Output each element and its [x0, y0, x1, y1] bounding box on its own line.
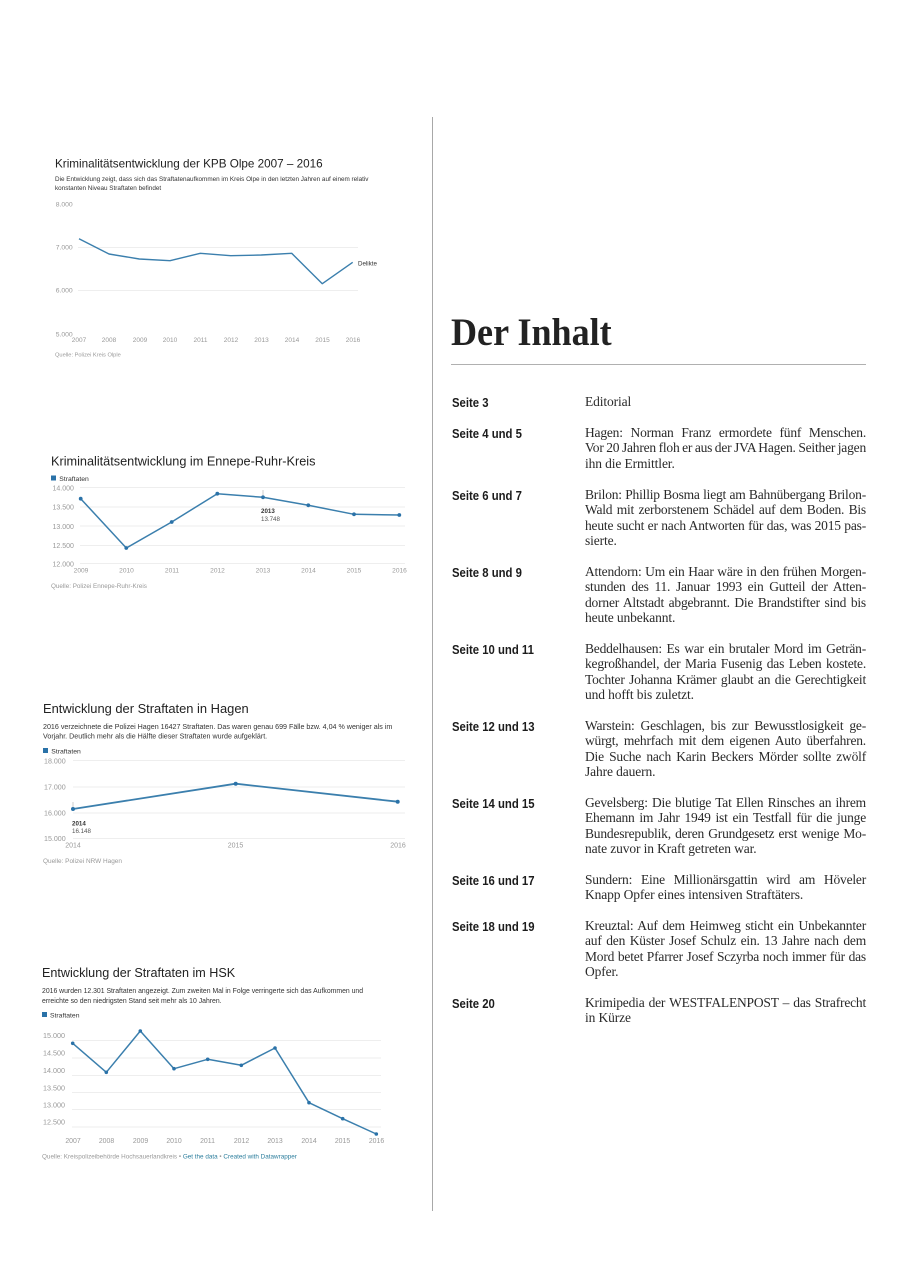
entry: Seite 10 und 11: Tochter Johanna Krämer glaubt an die Gerechtigkeit: [585, 672, 866, 687]
entry: Seite 6 und 7: Brilon: Phillip Bosma liegt am Bahnübergang Brilon-: [585, 487, 866, 502]
entry: Seite 4 und 5: Hagen: Norman Franz ermordete fünf Menschen.: [585, 425, 866, 440]
data line: [79, 239, 353, 284]
entry: Seite 20: Krimipedia der WESTFALENPOST – das Strafrecht: [585, 995, 866, 1010]
heading: Der Inhalt: Der Inhalt: [451, 311, 612, 354]
entry: Seite 12 und 13: Die Suche nach Karin Beckers Mörder sollte zwölf: [585, 749, 866, 764]
x axis labels: 2015: [315, 337, 330, 344]
source: Quelle: Polizei Kreis Olple: [55, 352, 121, 358]
highlighted value: 13.748: [261, 516, 280, 523]
entry: Seite 4 und 5: Vor 20 Jahren floh er aus der JVA Hagen. Seither jagen: [585, 440, 866, 455]
entry: Seite 14 und 15: nate zuvor in Kraft getreten war.: [585, 841, 756, 856]
chart description: [43, 723, 392, 740]
chart title: Entwicklung der Straftaten im HSK: [42, 966, 236, 980]
highlighted value: [261, 508, 280, 523]
y axis labels: [44, 758, 66, 843]
chart description: konstanten Niveau Straftaten befindet: [55, 185, 161, 192]
y axis labels: 12.000: [52, 562, 74, 568]
x axis labels: 2011: [165, 568, 179, 574]
entry: Seite 16 und 17: [452, 872, 866, 902]
entry: Seite 16 und 17: Seite 16 und 17: [452, 874, 535, 888]
entry: Seite 6 und 7: heute sucht er nach Antworten für das, was 2015 pas-: [585, 518, 866, 533]
y axis labels: 14.500: [43, 1048, 65, 1058]
data markers: [79, 492, 401, 550]
highlighted value: 2014: [72, 820, 86, 828]
entry: Seite 14 und 15: Ehemann im Jahr 1949 ist ein Testfall für die junge: [585, 810, 866, 825]
x axis labels: 2007: [72, 337, 87, 344]
entry: Seite 4 und 5: Seite 4 und 5: [452, 427, 522, 441]
entry: Seite 6 und 7: [452, 487, 866, 548]
source: Quelle: Polizei Ennepe-Ruhr-Kreis: [51, 583, 147, 590]
data line: [73, 1031, 376, 1134]
x axis labels: 2011: [200, 1138, 215, 1145]
entry: Seite 12 und 13: würgt, mehrfach mit dem eigenen Auto überfahren.: [585, 733, 866, 748]
x axis labels: 2007: [65, 1138, 81, 1145]
y axis labels: 18.000: [44, 758, 66, 766]
chart: HSK: [42, 966, 384, 1160]
y axis labels: 7.000: [56, 244, 73, 252]
entry: Seite 18 und 19: [452, 918, 866, 979]
entry: Seite 14 und 15: [452, 795, 866, 856]
entry: Seite 10 und 11: Seite 10 und 11: [452, 643, 534, 657]
legend: Straftaten: [59, 476, 89, 483]
y axis labels: 13.500: [43, 1084, 65, 1092]
highlight tick: [262, 490, 264, 497]
entry: Seite 3: Seite 3: [452, 396, 489, 410]
chart description: 2016 wurden 12.301 Straftaten angezeigt. Zum zweiten Mal in Folge verringerte sich das Aufkommen und: [42, 988, 363, 995]
y axis labels: [43, 1031, 65, 1126]
highlighted value: 16.148: [72, 828, 91, 835]
y axis labels: 6.000: [56, 288, 73, 294]
y axis labels: [56, 202, 73, 338]
x axis labels: [65, 842, 406, 850]
y axis labels: 14.000: [43, 1066, 65, 1075]
chart description: [55, 176, 369, 192]
entry: Seite 3: [452, 394, 631, 410]
entry: Seite 12 und 13: Jahre dauern.: [585, 764, 655, 779]
x axis labels: 2011: [194, 337, 208, 344]
y axis labels: 15.000: [44, 835, 66, 843]
entry: Seite 10 und 11: kegroßhandel, der Maria Fusenig das Leben kostete.: [585, 656, 866, 671]
x axis labels: 2015: [228, 842, 243, 850]
chart title: Kriminalitätsentwicklung der KPB Olpe 2007 – 2016: [55, 158, 323, 170]
x axis labels: 2013: [256, 568, 271, 574]
chart title: Kriminalitätsentwicklung im Ennepe-Ruhr-Kreis: [51, 454, 315, 468]
x axis labels: 2012: [234, 1138, 249, 1145]
entry: Seite 8 und 9: [452, 564, 866, 625]
x axis labels: 2014: [301, 568, 316, 574]
chart description: Die Entwicklung zeigt, dass sich das Straftatenaufkommen im Kreis Olpe in den letzten Jahren auf einem relativ: [55, 176, 369, 183]
entry: Seite 10 und 11: Beddelhausen: Es war ein brutaler Mord im Geträn-: [585, 641, 866, 656]
y axis labels: 13.000: [43, 1100, 65, 1110]
vertical column divider: [432, 117, 433, 1211]
highlighted value: [72, 820, 91, 835]
x axis labels: 2012: [210, 568, 225, 574]
x axis labels: 2016: [369, 1138, 384, 1145]
data line: [73, 784, 398, 809]
x axis labels: 2012: [224, 337, 239, 344]
entry: Seite 10 und 11: und hofft bis zuletzt.: [585, 687, 694, 702]
x axis labels: 2010: [166, 1138, 182, 1145]
entry: Seite 3: Editorial: [585, 394, 631, 409]
x axis labels: 2010: [163, 337, 178, 344]
line label: Delikte: [358, 260, 377, 268]
y axis labels: 13.000: [52, 524, 74, 531]
source: Quelle: Kreispolizeibehörde Hochsauerlandkreis • Get the data • Created with Datawrapper: [42, 1154, 297, 1160]
chart description: Vorjahr. Deutlich mehr als die Hälfte dieser Straftaten wurde aufgeklärt.: [43, 732, 267, 740]
x axis labels: 2013: [254, 337, 269, 344]
x axis labels: 2008: [102, 337, 117, 344]
x axis labels: 2016: [346, 337, 361, 344]
entry: Seite 20: Seite 20: [452, 997, 495, 1011]
entry: Seite 12 und 13: Warstein: Geschlagen, bis zur Bewusstlosigkeit ge-: [585, 718, 866, 733]
entry: Seite 12 und 13: [452, 718, 866, 779]
entry: Seite 8 und 9: dorner Altstadt abgebrannt. Die Brandstifter sind bis: [585, 595, 866, 610]
y axis labels: 5.000: [56, 332, 73, 338]
x axis labels: 2013: [267, 1138, 283, 1145]
x axis labels: 2014: [285, 337, 300, 344]
entry: Seite 18 und 19: Opfer.: [585, 964, 618, 979]
y axis labels: 16.000: [44, 810, 66, 818]
charts column: [42, 158, 407, 1160]
entry: Seite 16 und 17: Knapp Opfer eines intensiven Straftäters.: [585, 887, 803, 902]
data markers: [71, 1029, 378, 1136]
entry: Seite 14 und 15: Gevelsberg: Die blutige Tat Ellen Rinsches an ihrem: [585, 795, 866, 810]
entry: Seite 16 und 17: Sundern: Eine Millionärsgattin wird am Höveler: [585, 872, 866, 887]
x axis labels: 2015: [335, 1138, 350, 1145]
entry: Seite 8 und 9: stunden des 11. Januar 1993 ein Gutteil der Atten-: [585, 579, 866, 594]
y axis labels: [52, 486, 74, 568]
legend: Straftaten: [51, 748, 81, 756]
entry: Seite 14 und 15: Bundesrepublik, deren Grundgesetz erst wenige Mo-: [585, 826, 866, 841]
x axis labels: [65, 1138, 384, 1145]
x axis labels: 2010: [119, 568, 134, 574]
chart description: 2016 verzeichnete die Polizei Hagen 16427 Straftaten. Das waren genau 699 Fälle bzw. 4,04 % weniger als im: [43, 723, 392, 731]
x axis labels: 2009: [133, 337, 148, 344]
x axis labels: [74, 568, 407, 574]
x axis labels: 2015: [347, 568, 362, 574]
x axis labels: 2009: [133, 1138, 148, 1145]
data line: [81, 494, 399, 548]
y axis labels: 12.500: [43, 1118, 65, 1126]
x axis labels: 2009: [74, 568, 89, 574]
data markers: [71, 782, 400, 811]
chart description: erreichte so den niedrigsten Stand seit mehr als 10 Jahren.: [42, 998, 222, 1005]
entry: Seite 8 und 9: Attendorn: Um ein Haar wäre in den frühen Morgen-: [585, 564, 866, 579]
entry: Seite 6 und 7: Wald mit zerborstenem Schädel auf dem Boden. Bis: [585, 502, 866, 517]
x axis labels: 2016: [390, 842, 406, 850]
entry: Seite 18 und 19: Seite 18 und 19: [452, 920, 535, 934]
entry: Seite 18 und 19: Kreuztal: Auf dem Heimweg sticht ein Unbekannter: [585, 918, 866, 933]
entry: Seite 14 und 15: Seite 14 und 15: [452, 797, 535, 811]
y axis labels: 17.000: [44, 784, 66, 792]
chart description: [42, 988, 363, 1005]
highlight tick: [72, 802, 74, 809]
legend: Straftaten: [50, 1012, 80, 1020]
x axis labels: 2016: [392, 568, 407, 574]
entry: Seite 4 und 5: [452, 425, 866, 471]
entry: Seite 20: [452, 995, 866, 1025]
y axis labels: 12.500: [52, 543, 74, 550]
source: Quelle: Polizei NRW Hagen: [43, 858, 122, 865]
entry: Seite 12 und 13: Seite 12 und 13: [452, 720, 535, 734]
x axis labels: 2014: [301, 1138, 317, 1145]
y axis labels: 15.000: [43, 1031, 65, 1040]
entry: Seite 20: in Kürze: [585, 1010, 631, 1025]
entry: Seite 8 und 9: Seite 8 und 9: [452, 566, 522, 580]
entry: Seite 8 und 9: heute unbekannt.: [585, 610, 675, 625]
y axis labels: 8.000: [56, 202, 73, 208]
x axis labels: 2014: [65, 842, 81, 850]
chart: KPB Olpe: [55, 158, 377, 358]
entry: Seite 18 und 19: Mord betet Pfarrer Josef Sczyrba noch immer für das: [585, 949, 866, 964]
x axis labels: [72, 337, 361, 344]
highlighted value: 2013: [261, 508, 275, 515]
chart: Hagen: [43, 701, 406, 865]
entry: Seite 10 und 11: [452, 641, 866, 702]
y axis labels: 14.000: [52, 486, 74, 492]
chart title: Entwicklung der Straftaten in Hagen: [43, 701, 249, 716]
entry: Seite 18 und 19: auf den Küster Josef Schulz ein. 13 Jahre nach dem: [585, 933, 866, 948]
entry: Seite 6 und 7: sierte.: [585, 533, 617, 548]
entry: Seite 4 und 5: ihn die Ermittler.: [585, 456, 675, 471]
y axis labels: 13.500: [52, 504, 74, 512]
entry: Seite 6 und 7: Seite 6 und 7: [452, 489, 522, 503]
x axis labels: 2008: [99, 1138, 114, 1145]
chart: Ennepe-Ruhr-Kreis: [51, 454, 407, 590]
